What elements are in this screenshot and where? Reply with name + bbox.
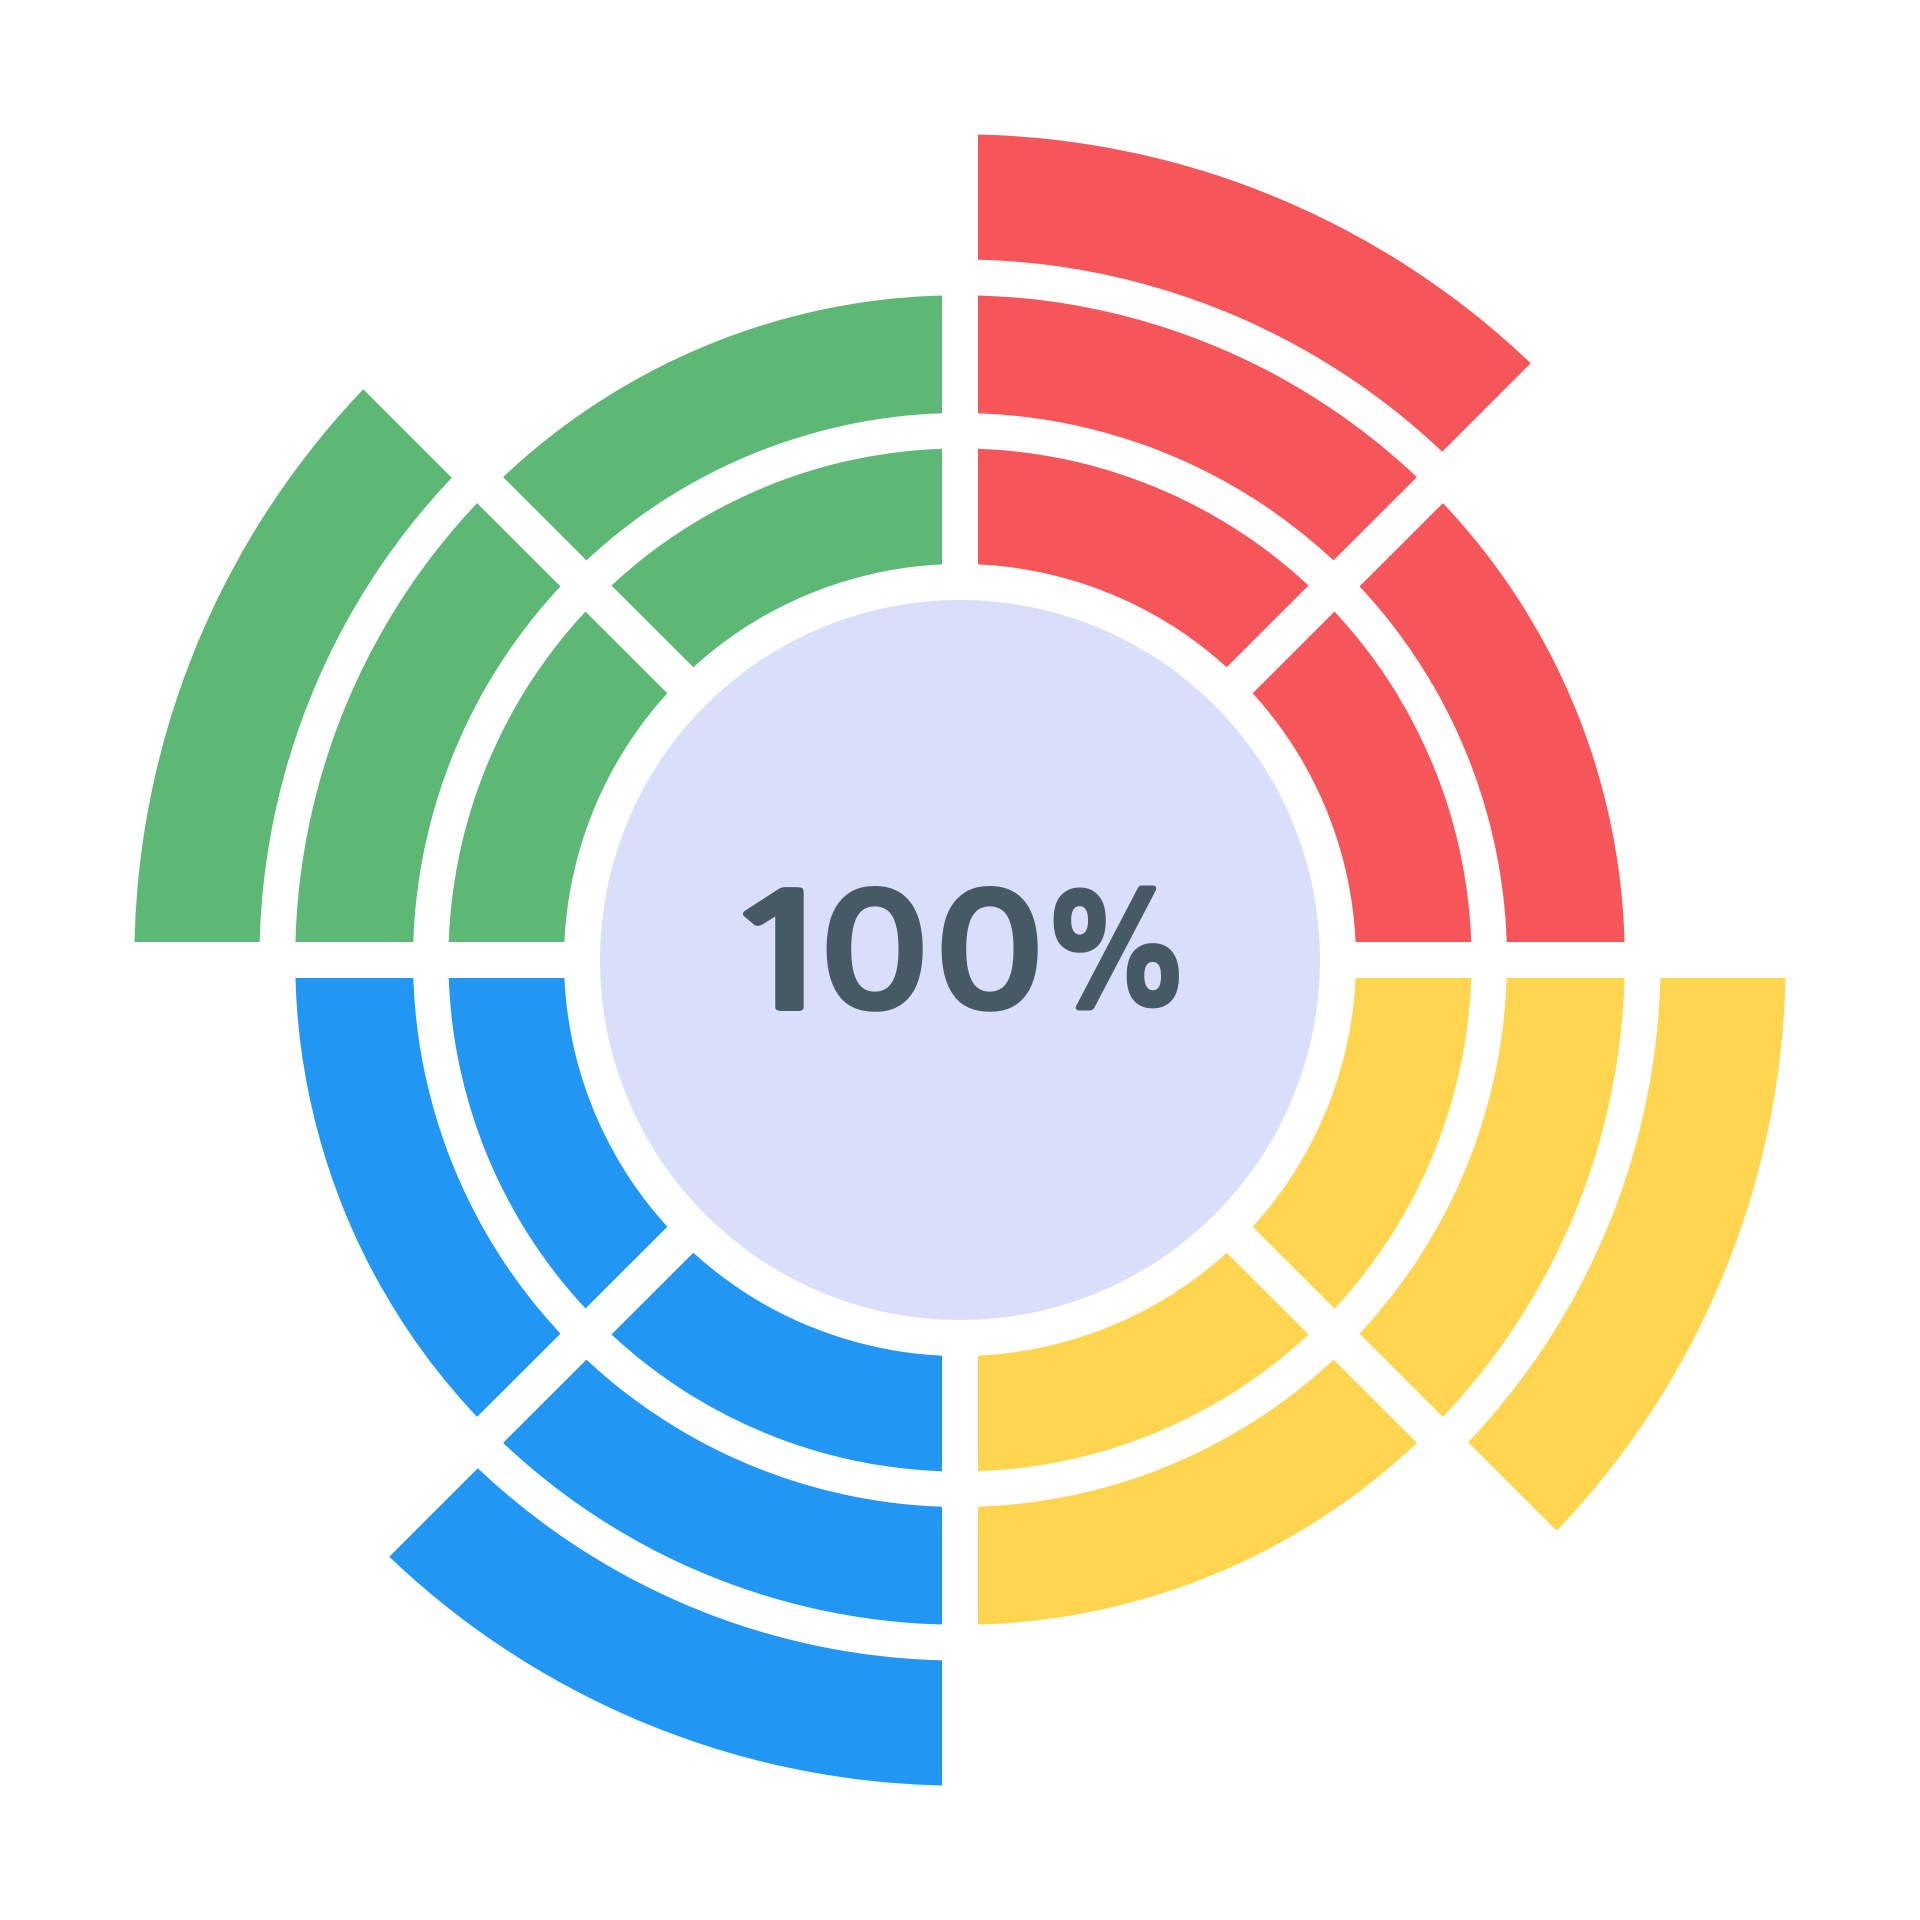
center circle [600,600,1320,1320]
green outer ring segment [134,389,452,942]
green middle ring segment two [503,295,942,560]
center label: 100% [716,875,1193,1033]
yellow inner ring segment two [978,1253,1309,1471]
blue inner ring segment two [449,978,667,1309]
quadrant: green segments [134,295,942,942]
yellow middle ring segment two [978,1360,1417,1625]
quadrant: yellow segments [978,978,1786,1625]
center label: 100%: 0 [933,875,1045,1033]
yellow outer ring segment [1468,978,1786,1531]
green middle ring segment one [295,503,560,942]
blue inner ring segment one [611,1253,942,1471]
red inner ring upper segment [978,449,1309,667]
red inner ring lower segment [1253,611,1471,942]
blue outer ring segment [389,1468,942,1786]
yellow inner ring segment one [1253,978,1471,1309]
quadrant: red segments [978,134,1625,942]
green inner ring segment two [611,449,942,667]
yellow middle ring segment one [1360,978,1625,1417]
red outer ring segment [978,134,1531,452]
center label: 100%: 1 [716,875,853,1033]
center label: 100%: 0 [818,875,930,1033]
red middle ring upper segment [978,295,1417,560]
center label: 100%: % [1038,879,1193,1030]
blue middle ring segment one [503,1360,942,1625]
quadrant: blue segments [295,978,942,1786]
red middle ring lower segment [1360,503,1625,942]
blue middle ring segment two [295,978,560,1417]
green inner ring segment one [449,611,667,942]
